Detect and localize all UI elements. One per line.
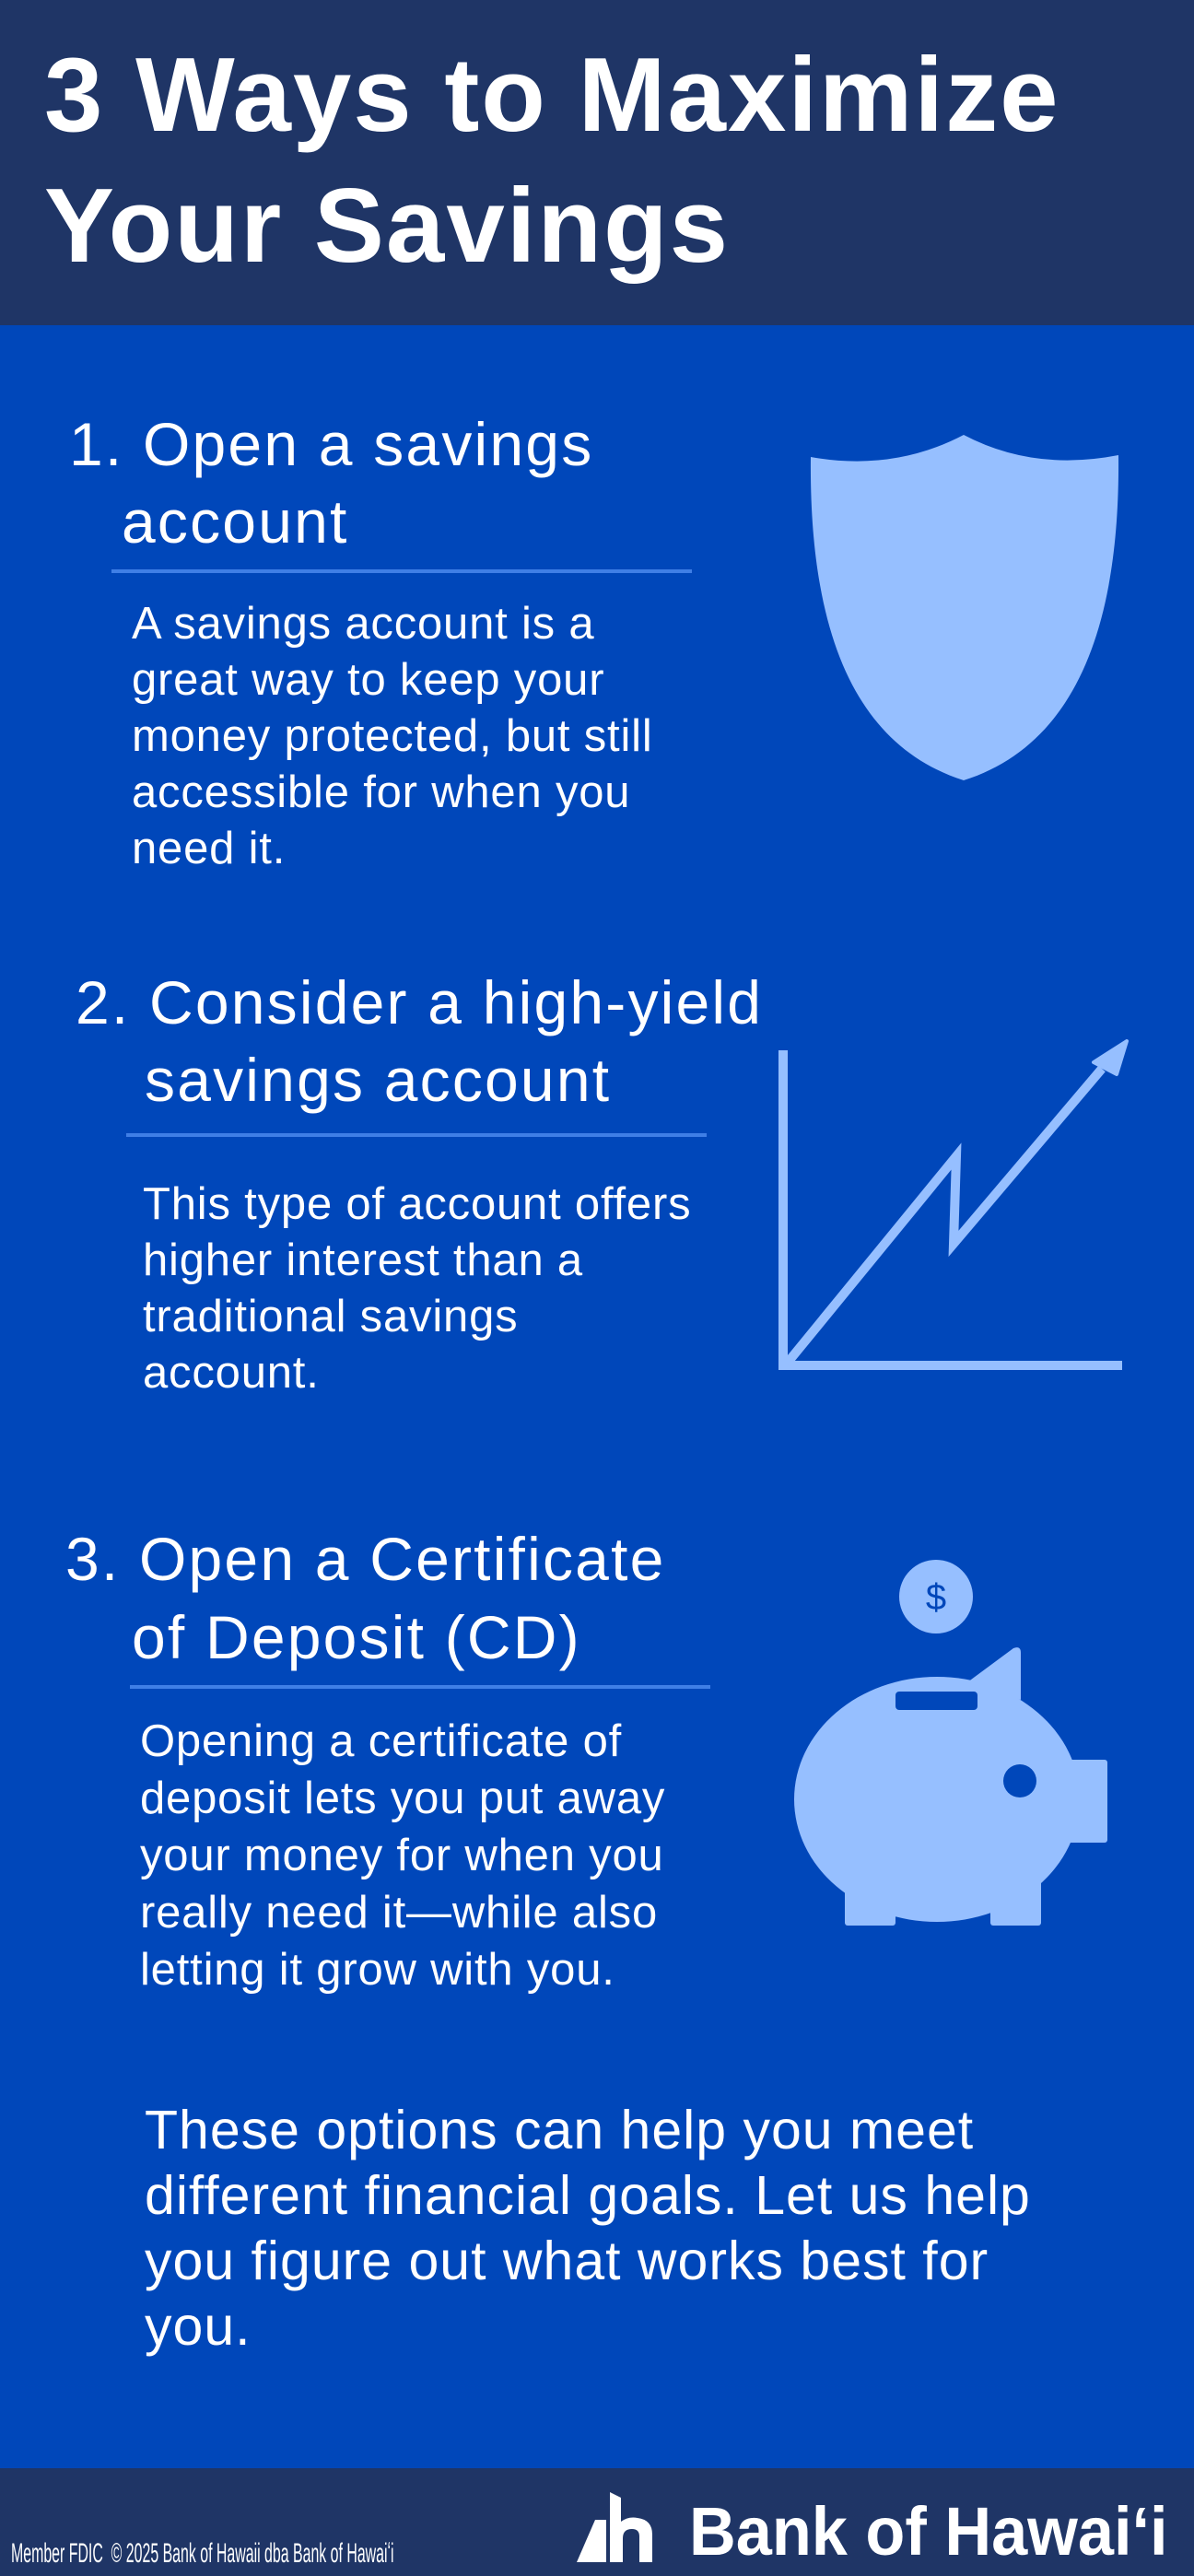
section 3 heading: 3. Open a Certificate [65,1525,666,1593]
section 3 body: letting it grow with you. [140,1945,615,1995]
section 2 body [143,1179,691,1398]
section 1 heading: 1. Open a savings [69,410,593,478]
section 1 body: accessible for when you [132,767,630,817]
section 3 body: deposit lets you put away [140,1774,665,1823]
section 1 heading: account [122,487,349,556]
section 2 body: This type of account offers [143,1179,691,1229]
icon: piggy bank with coin: $ [926,1577,946,1618]
section 2 heading: 2. Consider a high-yield [76,968,763,1036]
section 1 body: need it. [132,824,286,873]
section 3 body: your money for when you [140,1831,664,1880]
section 3 body [140,1716,665,1995]
section 1 heading [69,410,593,556]
section 2 body: higher interest than a [143,1235,583,1285]
section 3 heading: of Deposit (CD) [132,1603,581,1671]
section 2 body: traditional savings [143,1292,518,1341]
section 2 heading [76,968,763,1114]
logo: Bank of Hawaiʻi [689,2493,1168,2570]
title: Your Savings [44,168,730,285]
section 2 body: account. [143,1348,320,1398]
section 2 heading: savings account [145,1046,611,1114]
section 3 heading [65,1525,666,1671]
closing message: you figure out what works best for [145,2231,989,2291]
section 3 body: Opening a certificate of [140,1716,622,1766]
closing message: you. [145,2296,252,2357]
closing message: These options can help you meet [145,2100,974,2160]
section 1 body: great way to keep your [132,655,604,705]
title: 3 Ways to Maximize [44,37,1059,154]
footer [0,2468,1194,2576]
closing message [145,2100,1031,2357]
title [44,37,1059,285]
section 3 body: really need it—while also [140,1888,658,1938]
section 1 body: money protected, but still [132,711,653,761]
section 1 body: A savings account is a [132,599,594,649]
section 1 body [132,599,653,873]
closing message: different financial goals. Let us help [145,2165,1031,2226]
header band [0,0,1194,325]
footer legal text: Member FDIC © 2025 Bank of Hawaii dba Bank of Hawaiʻi [11,2538,394,2569]
